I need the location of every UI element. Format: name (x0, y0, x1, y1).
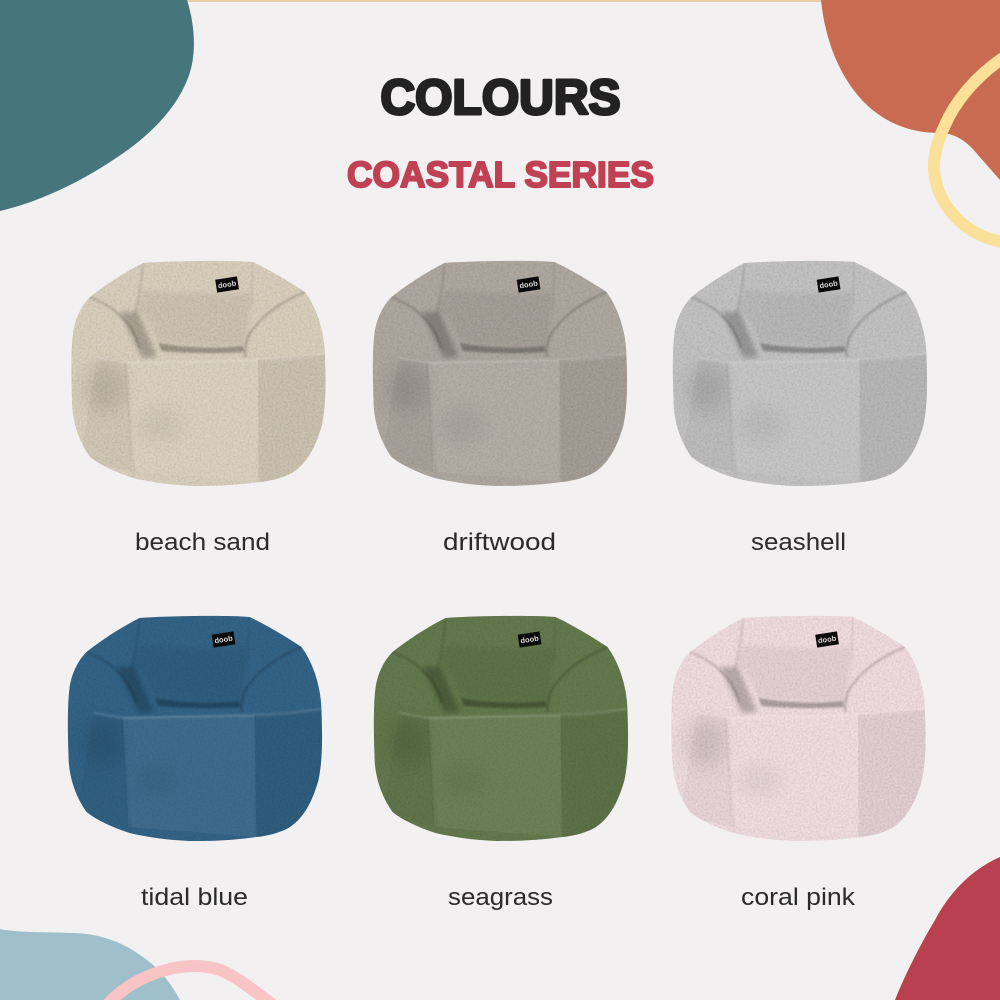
blob: light blue bottom left (0, 929, 180, 1000)
ring: yellow top right (934, 58, 1000, 242)
blob: terracotta top right (821, 0, 1000, 180)
bean bag: driftwood (362, 250, 642, 500)
title: COLOURS (380, 71, 620, 125)
blob: teal top left (0, 0, 194, 211)
bean bag: coral pink (660, 605, 940, 855)
bean bag: beach sand (60, 250, 340, 500)
label: beach sand: beach sand (135, 529, 270, 556)
top accent line (187, 0, 827, 2)
bean bag: tidal blue (56, 605, 336, 855)
ring: pink bottom left (108, 966, 272, 1000)
subtitle: COASTAL SERIES (347, 154, 654, 195)
label: coral pink: coral pink (741, 884, 856, 911)
bean bag: seagrass (362, 605, 642, 855)
label: tidal blue: tidal blue (141, 884, 248, 911)
label: driftwood: driftwood (443, 529, 556, 556)
label: seashell: seashell (751, 529, 846, 556)
bean bag: seashell (662, 250, 942, 500)
label: seagrass: seagrass (448, 884, 553, 911)
blob: red bottom right (895, 857, 1000, 1000)
